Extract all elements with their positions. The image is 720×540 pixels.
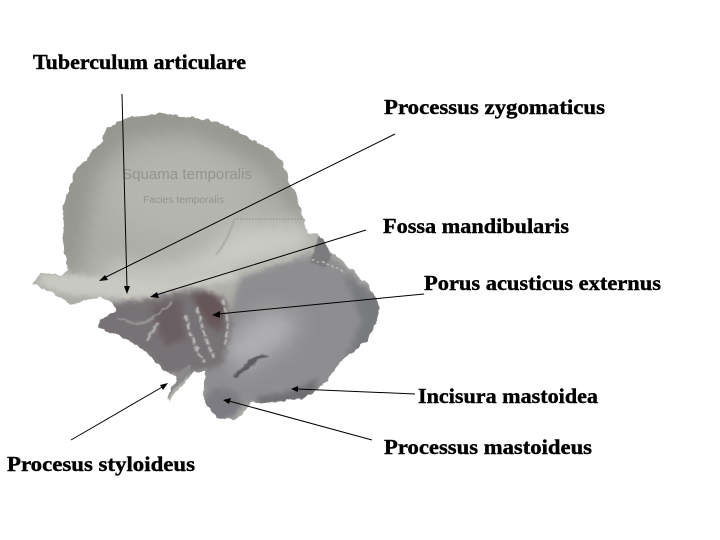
temporal bone illustration	[33, 100, 385, 420]
squama light centre	[132, 168, 228, 216]
zygomatic process	[36, 271, 238, 301]
styloid process	[167, 365, 192, 398]
arrow: Tuberculum articulare	[122, 94, 130, 294]
squama lower bright band	[100, 222, 315, 290]
label: Processus zygomaticus: Processus zygomaticus	[384, 95, 605, 119]
arrow: Processus zygomaticus	[99, 134, 395, 281]
styloid highlight	[146, 323, 158, 340]
label: Processus mastoideus: Processus mastoideus	[384, 435, 592, 459]
label: Porus acusticus externus: Porus acusticus externus	[424, 271, 661, 295]
dark fossa behind tympanic plate	[150, 298, 186, 345]
arrow: Incisura mastoidea	[291, 386, 415, 394]
dotted suture line	[234, 218, 302, 220]
underside dark region	[90, 290, 232, 375]
mastoid crack	[233, 354, 268, 378]
label: Tuberculum articulare: Tuberculum articulare	[33, 50, 246, 74]
squama rim shading	[60, 112, 305, 276]
label: Procesus styloideus: Procesus styloideus	[7, 452, 195, 476]
tympanic plate ridges	[186, 300, 228, 362]
external acoustic opening	[192, 291, 226, 332]
arrow: Fossa mandibularis	[150, 230, 366, 298]
mastoid lighter highlight	[222, 310, 300, 372]
diagram: temporal bone with labels	[7, 54, 661, 476]
faint caption: Squama temporalis: Squama temporalis	[122, 166, 252, 183]
sutural ridge at top of mastoid	[310, 235, 332, 268]
mastoid tip	[203, 388, 241, 420]
label: Fossa mandibularis: Fossa mandibularis	[383, 214, 569, 238]
incisura shadow	[258, 378, 318, 405]
squamous groove	[216, 220, 234, 255]
mandibular fossa ridge	[118, 302, 172, 323]
arrow: Porus acusticus externus	[212, 294, 424, 318]
right edge darker	[346, 278, 380, 356]
arrow: Procesus styloideus	[71, 383, 168, 440]
faint caption: Facies temporalis: Facies temporalis	[143, 195, 224, 206]
arrow: Processus mastoideus	[223, 398, 372, 440]
bone silhouette	[33, 113, 380, 420]
label: Incisura mastoidea: Incisura mastoidea	[418, 384, 599, 408]
petrous and mastoid region	[200, 250, 385, 420]
